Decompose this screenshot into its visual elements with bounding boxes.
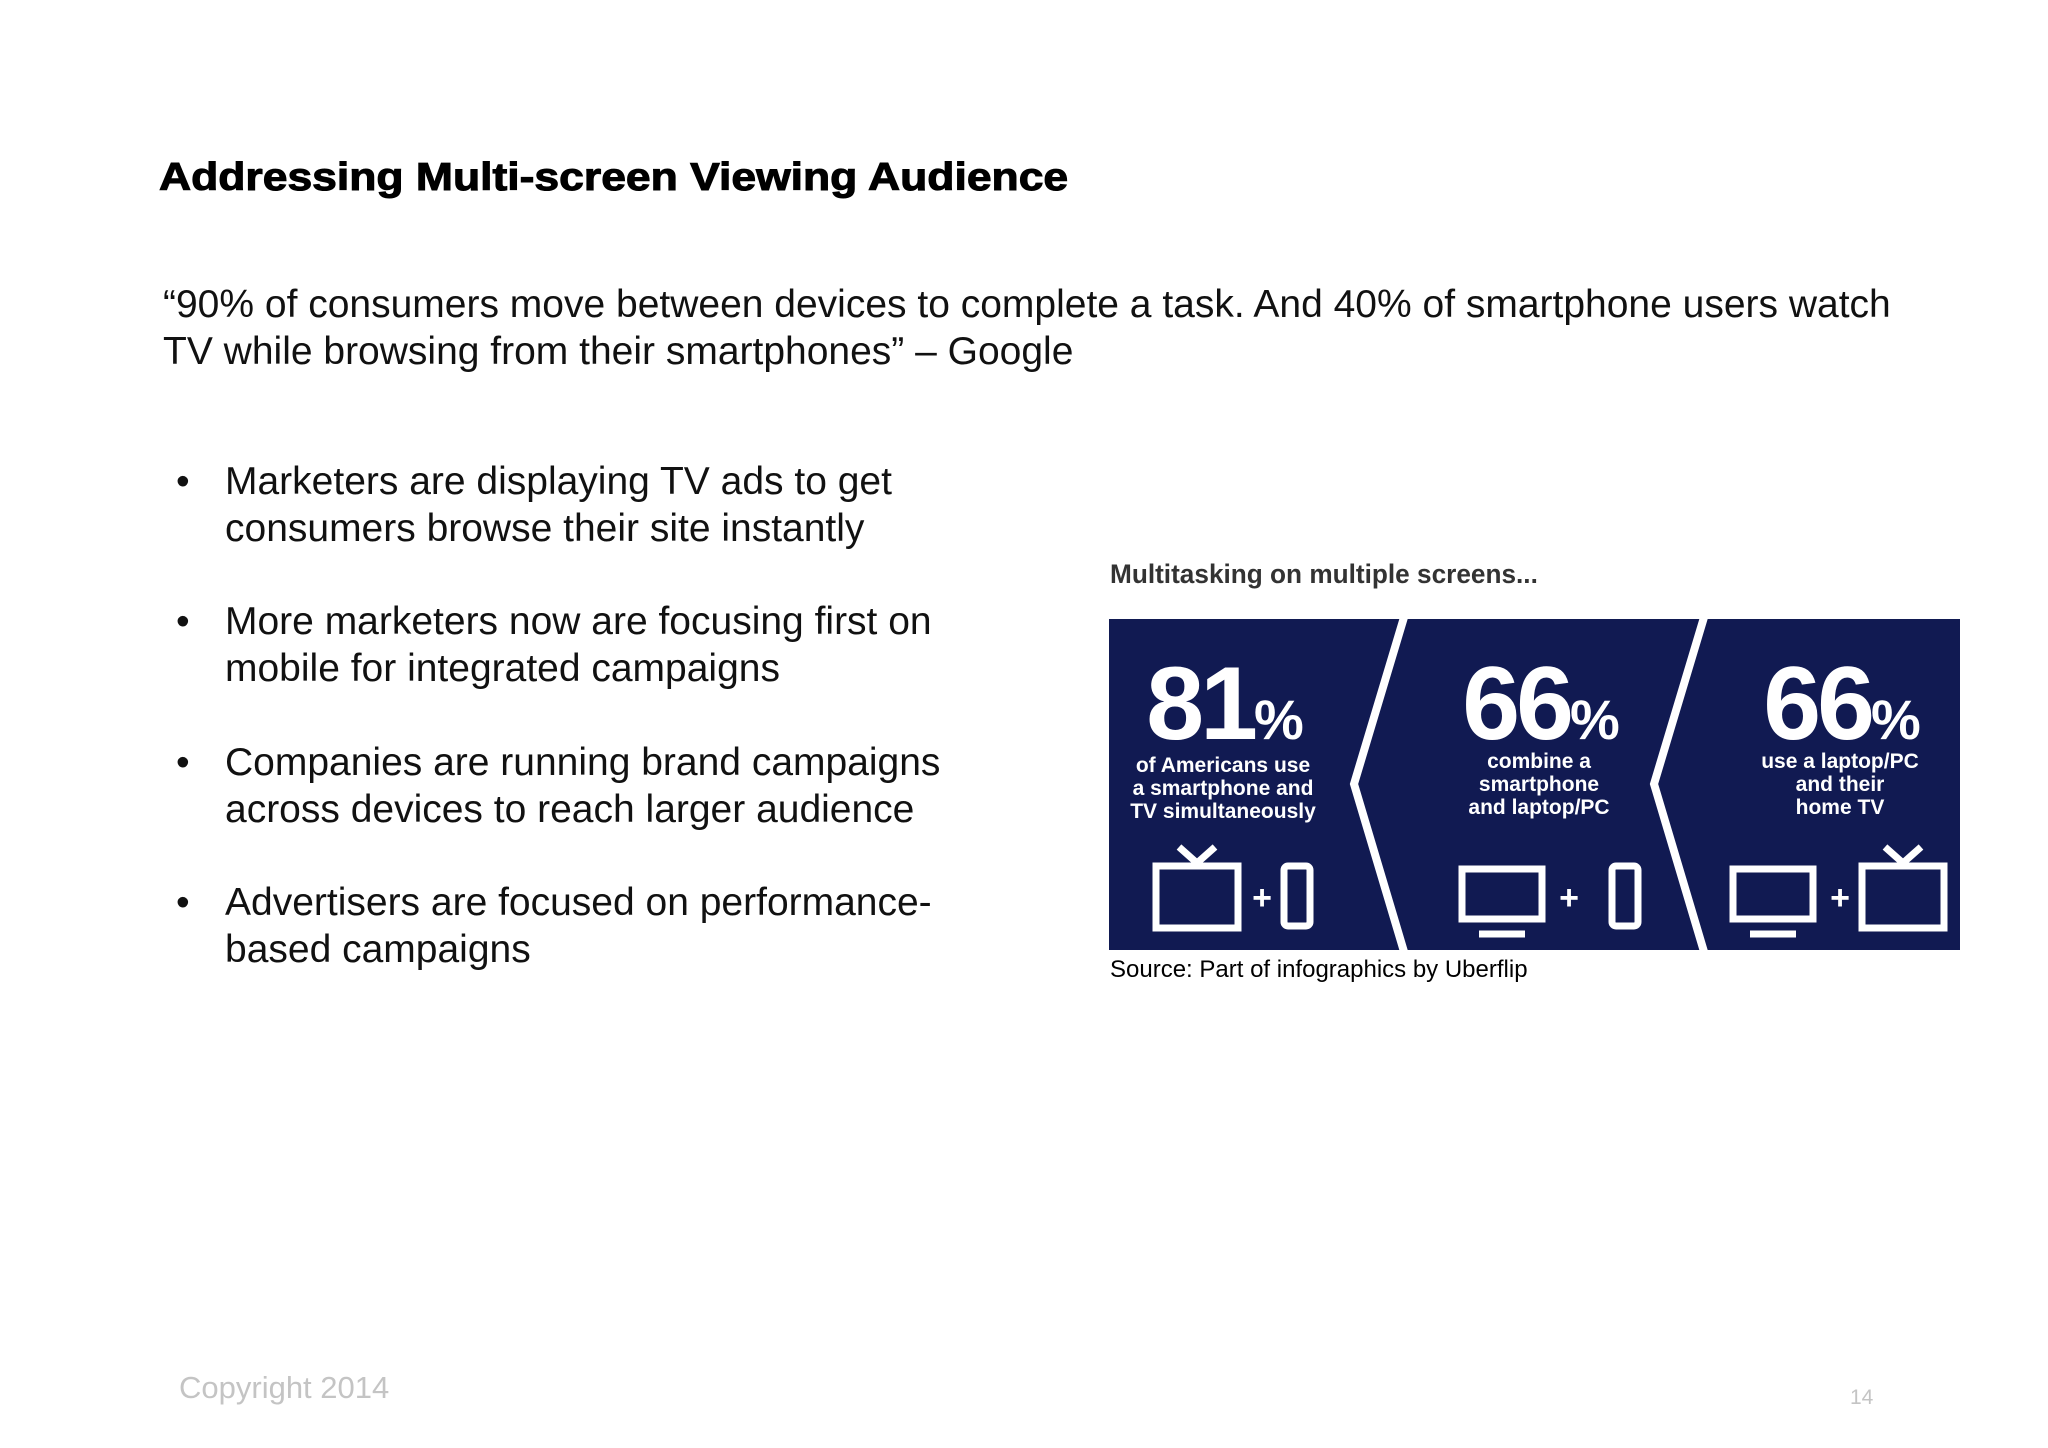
bullet 2 bbox=[176, 600, 932, 690]
stat 81% bbox=[1130, 646, 1316, 823]
bullet list: More marketers now are focusing first on bbox=[225, 600, 932, 643]
infographic panel bbox=[1109, 619, 1960, 950]
stat 81%: TV simultaneously bbox=[1130, 800, 1316, 823]
quote bbox=[163, 283, 1891, 373]
copyright: Copyright 2014 bbox=[179, 1370, 389, 1405]
bullet list: mobile for integrated campaigns bbox=[225, 647, 780, 690]
bullet list: Advertisers are focused on performance- bbox=[225, 881, 932, 924]
stat 66% b: 66% bbox=[1763, 646, 1920, 762]
stat 66% b bbox=[1761, 646, 1920, 819]
bullet list: Companies are running brand campaigns bbox=[225, 741, 940, 784]
icons: tv + phone bbox=[1156, 847, 1944, 934]
stat 66% a: and laptop/PC bbox=[1468, 796, 1610, 819]
bullet 1 bbox=[176, 460, 892, 550]
infographic panel: + bbox=[1559, 879, 1579, 917]
source: Source: Part of infographics by Uberflip bbox=[1110, 956, 1528, 983]
infographic panel: + bbox=[1830, 879, 1850, 917]
bullet 1: • bbox=[176, 460, 190, 503]
bullet list: consumers browse their site instantly bbox=[225, 507, 864, 550]
quote: “90% of consumers move between devices to complete a task. And 40% of smartphone users watch bbox=[163, 283, 1891, 326]
bullet 3 bbox=[176, 741, 940, 831]
chart heading: Multitasking on multiple screens... bbox=[1110, 559, 1538, 589]
page number: 14 bbox=[1850, 1386, 1873, 1409]
stat 66% a: smartphone bbox=[1479, 773, 1599, 796]
bullet 4 bbox=[176, 881, 932, 971]
bullet 4: • bbox=[176, 881, 190, 924]
stat 81%: 81% bbox=[1146, 646, 1303, 762]
bullet list bbox=[176, 460, 940, 971]
quote: TV while browsing from their smartphones” – Google bbox=[163, 330, 1073, 373]
stat 66% b: use a laptop/PC bbox=[1761, 750, 1919, 773]
bullet list: based campaigns bbox=[225, 928, 531, 971]
stat 66% a: 66% bbox=[1462, 646, 1619, 762]
infographic panel: + bbox=[1252, 879, 1272, 917]
stat 66% a bbox=[1462, 646, 1619, 819]
bullet list: Marketers are displaying TV ads to get bbox=[225, 460, 892, 503]
title: Addressing Multi-screen Viewing Audience bbox=[159, 156, 1068, 199]
stat 81%: a smartphone and bbox=[1133, 777, 1313, 800]
separators bbox=[1354, 614, 1705, 955]
stat 66% b: home TV bbox=[1796, 796, 1884, 819]
stat 66% a: combine a bbox=[1487, 750, 1591, 773]
stat 66% b: and their bbox=[1796, 773, 1884, 796]
stat 81%: of Americans use bbox=[1136, 754, 1310, 777]
bullet 2: • bbox=[176, 600, 190, 643]
bullet 3: • bbox=[176, 741, 190, 784]
bullet list: across devices to reach larger audience bbox=[225, 788, 914, 831]
